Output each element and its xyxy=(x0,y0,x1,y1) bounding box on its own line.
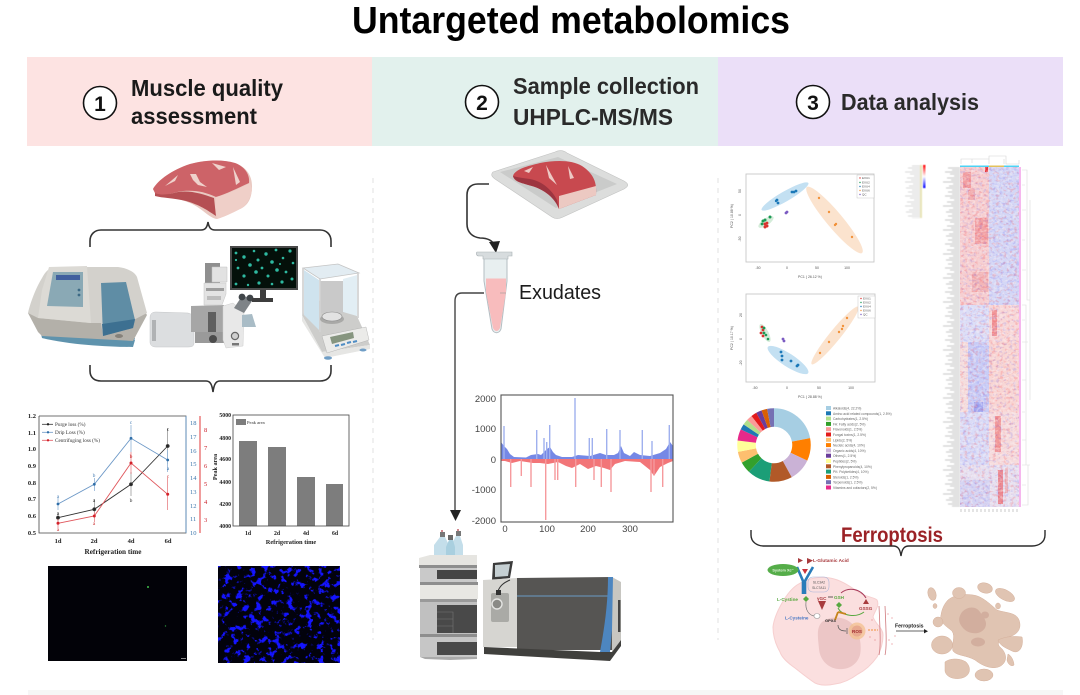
donut legend: Others(1, 2.5%) xyxy=(833,454,856,458)
x axis title: Refrigeration time xyxy=(266,539,316,546)
icon: mass spectrometer xyxy=(483,561,621,661)
leakage dots xyxy=(869,613,896,645)
cell body xyxy=(773,577,883,685)
icon: inverted fluorescence microscope xyxy=(150,263,256,348)
diagram: ferroptosis pathway in cell xyxy=(768,558,928,685)
donut legend: Organic acids(4, 10%) xyxy=(833,449,866,453)
label: exudates: Exudates xyxy=(519,282,601,304)
left axis and frame xyxy=(39,416,186,533)
significance letters: c xyxy=(167,427,170,433)
donut legend: FA: Fatty acids(2, 5%) xyxy=(833,422,865,426)
series: centrifuging loss xyxy=(56,452,169,528)
label: GSSG: GSSG xyxy=(859,606,873,611)
y axis labels: 4000 xyxy=(219,524,231,530)
column labels xyxy=(961,509,1017,512)
pump module xyxy=(420,568,477,582)
icon: spectrophotometer xyxy=(28,266,147,347)
ROS burst xyxy=(848,622,878,640)
significance letters: b xyxy=(93,473,96,479)
confidence ellipses xyxy=(757,179,868,258)
glutamate markers xyxy=(798,558,813,564)
legend: Peak area xyxy=(247,420,265,425)
red right axis: 7 xyxy=(204,445,208,452)
axis text: PC1 ( 26.12 %) xyxy=(798,275,822,279)
x tick labels xyxy=(55,538,172,545)
x tick labels: 2d xyxy=(91,538,98,545)
x axis labels xyxy=(502,524,638,535)
donut legend: Alkaloids(4, 22.2%) xyxy=(833,406,861,410)
bar chart: peak area xyxy=(212,413,349,546)
ROS burst: ROS xyxy=(852,629,862,634)
significance letters: c xyxy=(130,420,133,426)
y axis labels: 4400 xyxy=(219,480,231,486)
sample points xyxy=(775,190,797,204)
label: L-Glutamic Acid: L-Glutamic Acid xyxy=(813,558,849,563)
bracket: ferroptosis xyxy=(751,530,1045,556)
left axis labels: 0.6 xyxy=(28,513,37,520)
legend: EXU4 xyxy=(862,184,870,188)
x labels: 4d xyxy=(303,531,310,537)
side panel xyxy=(612,577,621,652)
blue right axis: 14 xyxy=(190,475,197,482)
label: gamma GC: γGC xyxy=(817,596,827,601)
y axis labels xyxy=(472,394,496,527)
step number 3: 3 xyxy=(807,92,819,115)
donut legend: Amino acid related compounds(1, 2.5%) xyxy=(833,412,892,416)
sample points xyxy=(760,326,764,337)
bars xyxy=(239,441,343,526)
label: L-Cystine: L-Cystine xyxy=(777,597,798,602)
row annotation bar xyxy=(1019,167,1021,507)
bracket: top xyxy=(90,222,331,247)
donut legend: Lipids(2, 5%) xyxy=(833,438,852,442)
label: L-Cysteine xyxy=(785,602,820,620)
icon: microcentrifuge tube with exudate xyxy=(476,252,512,333)
significance letters: b xyxy=(130,454,133,460)
front panel xyxy=(322,327,369,353)
heading: UHPLC-MS/MS: UHPLC-MS/MS xyxy=(513,104,673,130)
axis text xyxy=(730,313,854,399)
significance letters: b xyxy=(130,498,133,504)
series: drip loss xyxy=(57,425,169,510)
panel header: muscle quality assessment xyxy=(27,57,372,146)
monitor stand xyxy=(252,290,273,302)
donut legend: Flavonoids(1, 2.5%) xyxy=(833,428,862,432)
cell-level noise xyxy=(960,167,1019,507)
icon: UHPLC stack xyxy=(419,529,478,660)
donut legend: Vitamins and cofactors(2, 5%) xyxy=(833,486,877,490)
fluorescence image: blue nuclei xyxy=(218,566,340,663)
axis text: -50 xyxy=(752,386,758,390)
legend xyxy=(858,296,875,318)
red right axis: 4 xyxy=(204,499,208,506)
axis text: 100 xyxy=(848,386,854,390)
significance letters xyxy=(57,420,170,533)
y axis labels: 4800 xyxy=(219,436,231,442)
chart: mirrored total ion spectrum xyxy=(472,394,673,535)
light source box xyxy=(150,312,194,347)
legend: EXU1 xyxy=(863,296,871,300)
axis text: PC1 ( 28.88 %) xyxy=(798,395,822,399)
y axis labels: 1000 xyxy=(475,424,496,435)
left axis labels: 0.7 xyxy=(28,496,37,503)
icon: ruptured dead cell xyxy=(926,581,1023,681)
donut legend: Peptides(2, 5%) xyxy=(833,460,856,464)
fluorescence image: dim xyxy=(48,566,187,661)
step number 1: 1 xyxy=(94,93,106,116)
x tick labels: 1d xyxy=(55,538,62,545)
axis text: 0 xyxy=(786,386,788,390)
illuminator column xyxy=(204,283,226,305)
left axis labels xyxy=(28,413,37,537)
label: Ferroptosis arrow xyxy=(895,624,928,633)
left axis labels: 0.5 xyxy=(28,530,37,537)
legend xyxy=(857,175,874,198)
legend: EXU6 xyxy=(863,308,871,312)
heading: muscle quality: Muscle quality xyxy=(131,75,283,101)
autosampler module xyxy=(420,585,478,599)
y axis labels: 4600 xyxy=(219,457,231,463)
axis text: -20 xyxy=(739,360,743,366)
red right axis: 6 xyxy=(204,463,208,470)
axis text: 20 xyxy=(739,313,743,317)
glass panes xyxy=(304,270,319,330)
donut legend: PK: Polyketides(4, 10%) xyxy=(833,470,869,474)
x axis labels: 0 xyxy=(502,524,508,535)
icon: raw beef steak xyxy=(153,160,252,219)
step number 3 xyxy=(796,86,830,118)
significance letters: a xyxy=(57,527,60,533)
system xc ellipse: System Xc⁻ xyxy=(772,568,794,572)
x labels: 1d xyxy=(245,531,252,537)
scatter plot: PCA lower xyxy=(730,294,875,399)
y axis labels: 2000 xyxy=(475,394,496,405)
top dendrogram xyxy=(961,156,1019,164)
label: GSH: GSH xyxy=(834,595,845,600)
confidence ellipses xyxy=(757,303,863,379)
label: L-Cystine xyxy=(777,596,809,602)
donut legend: Steroids(1, 2.5%) xyxy=(833,475,858,479)
donut legend: Carbohydrates(1, 2.5%) xyxy=(833,417,868,421)
significance letters: a xyxy=(57,511,60,517)
left axis labels: 1.2 xyxy=(28,413,36,420)
red right axis: 8 xyxy=(204,427,207,434)
blue right axis xyxy=(186,416,197,537)
axis text: PC2 ( 10.17 %) xyxy=(730,326,734,350)
line chart: losses over refrigeration time xyxy=(28,413,208,556)
donut legend: Phenylpropanoids(4, 10%) xyxy=(833,465,872,469)
y axis labels: -1000 xyxy=(472,485,496,496)
step number 2: 2 xyxy=(476,92,488,115)
legend xyxy=(42,421,100,444)
significance letters: a xyxy=(93,498,96,504)
x axis labels: 300 xyxy=(622,524,638,535)
x labels xyxy=(245,531,339,537)
x labels: 2d xyxy=(274,531,281,537)
SLC labels: SLC3A2 xyxy=(813,580,825,584)
axis text: 50 xyxy=(738,189,742,193)
back wall xyxy=(320,281,351,313)
right dendrogram xyxy=(1022,170,1030,505)
significance letters: a xyxy=(57,494,60,500)
legend: EXU1 xyxy=(862,176,870,180)
left axis labels: 0.8 xyxy=(28,480,37,487)
label: gamma GC xyxy=(817,596,833,610)
red right axis xyxy=(200,416,208,533)
axis text xyxy=(730,189,850,279)
axis text: 0 xyxy=(739,338,743,340)
system xc ellipse xyxy=(768,564,798,576)
legend: QC xyxy=(862,192,867,196)
step number 1 xyxy=(84,86,116,120)
x axis labels: 100 xyxy=(539,524,555,535)
red right axis: 3 xyxy=(204,517,207,524)
blue right axis: 13 xyxy=(190,489,196,496)
transporter receptor xyxy=(797,567,813,594)
y axis title: Peak area xyxy=(212,454,219,480)
x tick labels: 6d xyxy=(165,538,172,545)
step number 2 xyxy=(466,86,498,118)
nucleus xyxy=(818,618,861,669)
ferroptosis heading: Ferroptosis xyxy=(841,524,943,547)
legend: QC xyxy=(863,312,868,316)
scatter plot: PCA upper xyxy=(730,174,874,279)
donut legend: Fungal toxins(1, 2.5%) xyxy=(833,433,866,437)
main body xyxy=(223,303,244,348)
axis text: -50 xyxy=(738,236,742,242)
series: purge loss xyxy=(57,428,169,522)
icon: analytical balance xyxy=(302,264,370,360)
arrow: tray to tube xyxy=(467,184,500,253)
blue trim xyxy=(600,577,613,652)
base xyxy=(484,640,621,661)
legend: EXU6 xyxy=(862,188,870,192)
label: Ferroptosis arrow: Ferroptosis xyxy=(895,624,924,630)
left axis labels: 1.0 xyxy=(28,446,36,453)
title: Untargeted metabolomics xyxy=(352,0,790,42)
strong signal patches xyxy=(963,172,971,188)
blue right axis: 12 xyxy=(190,503,196,510)
donut legend xyxy=(826,406,892,490)
axis text: 50 xyxy=(817,386,821,390)
panel header: data analysis xyxy=(718,57,1063,146)
SLC labels xyxy=(808,577,829,592)
x tick labels: 4d xyxy=(128,538,135,545)
heatmap: differential metabolites xyxy=(905,156,1030,512)
rear frame xyxy=(191,305,224,332)
axis text: PC2 ( 10.88 %) xyxy=(730,204,734,228)
blue right axis: 16 xyxy=(190,448,197,455)
x labels: 6d xyxy=(332,531,339,537)
significance letters: a xyxy=(93,521,96,527)
negative mode trace xyxy=(501,459,673,520)
colour scale and annotation legend xyxy=(905,165,926,218)
heatmap blocks xyxy=(960,167,1019,507)
y axis labels: 0 xyxy=(491,455,496,466)
main dark cabinet xyxy=(517,577,612,650)
donut chart: metabolite classes xyxy=(746,418,802,472)
icon: meat in tray xyxy=(492,151,628,218)
donut legend: Terpenoids(1, 2.5%) xyxy=(833,481,863,485)
y axis labels: 5000 xyxy=(219,413,231,419)
left axis labels: 0.9 xyxy=(28,463,37,470)
eyepieces xyxy=(234,296,254,313)
axis text: 50 xyxy=(815,266,819,270)
blue right axis: 17 xyxy=(190,434,197,441)
x axis title: Refrigeration time xyxy=(85,548,141,556)
red right axis: 5 xyxy=(204,481,207,488)
column oven module xyxy=(420,602,477,634)
illuminator head xyxy=(205,263,220,283)
legend: EXU2 xyxy=(862,180,870,184)
legend: EXU4 xyxy=(863,304,871,308)
donut legend: Nucleic acids(4, 10%) xyxy=(833,444,865,448)
blue right axis: 18 xyxy=(190,420,196,427)
bracket: bottom xyxy=(90,365,331,392)
heading: data analysis: Data analysis xyxy=(841,89,979,115)
stage plate xyxy=(242,314,256,327)
blue right axis: 10 xyxy=(190,530,196,537)
label: L-Cysteine: L-Cysteine xyxy=(785,616,809,620)
source housing xyxy=(483,578,517,647)
y axis labels: 4200 xyxy=(219,502,231,508)
tablet xyxy=(492,561,513,580)
GSH GSSG cycle xyxy=(836,589,869,615)
positive mode trace xyxy=(501,398,673,459)
SLC labels: SLC7A11 xyxy=(812,586,826,590)
blue right axis: 15 xyxy=(190,461,196,468)
y axis labels: -2000 xyxy=(472,516,496,527)
weighing pan xyxy=(320,314,344,324)
x axis labels: 200 xyxy=(580,524,596,535)
legend: Drip Loss (%) xyxy=(55,429,85,436)
icon: monitor with green cells xyxy=(230,246,298,302)
degasser module xyxy=(419,555,477,568)
heading: sample collection: Sample collection xyxy=(513,73,699,99)
axis text: 0 xyxy=(786,266,788,270)
row labels xyxy=(940,167,960,507)
heading: assessment: assessment xyxy=(131,103,257,129)
legend: Purge loss (%) xyxy=(55,421,86,428)
significance letters: a xyxy=(167,466,170,472)
microscope cell image dots xyxy=(235,249,294,286)
arrow: tube to LC-MS xyxy=(450,293,484,521)
axis text: 100 xyxy=(844,266,850,270)
legend: Centrifuging loss (%) xyxy=(55,437,100,444)
label: GPX4 xyxy=(825,612,847,634)
panel header: sample collection xyxy=(372,57,718,146)
blue right axis: 11 xyxy=(190,516,196,523)
left axis labels: 1.1 xyxy=(28,430,36,437)
column annotation bar xyxy=(960,166,1019,167)
axis text: 0 xyxy=(738,214,742,216)
legend: EXU2 xyxy=(863,300,871,304)
mitochondrion/membrane lines xyxy=(879,606,886,655)
label: GPX4: GPX4 xyxy=(825,618,836,623)
significance letters: c xyxy=(167,474,170,480)
solvent bottles xyxy=(434,529,463,556)
base xyxy=(302,300,370,352)
detector module xyxy=(420,637,477,657)
axis text: -50 xyxy=(755,266,761,270)
y axis labels xyxy=(219,413,231,530)
